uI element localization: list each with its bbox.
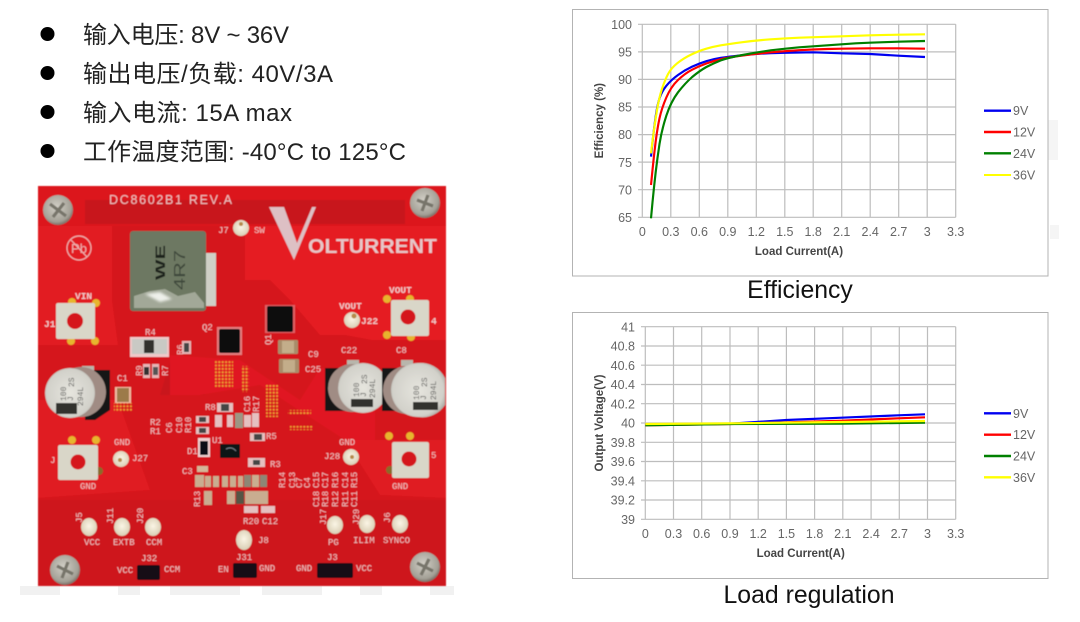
- regulation x axis labels: 0.9: [721, 527, 739, 541]
- regulation x axis labels: 3.3: [947, 527, 964, 541]
- silkscreen labels: R4: [145, 328, 156, 338]
- silkscreen labels: EN: [218, 565, 229, 575]
- bullet: input voltage: 输入电压: 8V ~ 36V: [83, 22, 289, 49]
- silkscreen labels: C9: [308, 350, 319, 360]
- regulation legend: 24V: [1013, 450, 1036, 464]
- silkscreen labels: J17: [319, 509, 329, 525]
- efficiency y axis labels: 100: [611, 18, 632, 32]
- silkscreen labels: VOUT: [339, 301, 362, 312]
- silkscreen labels: R1: [150, 427, 161, 437]
- silkscreen labels: VCC: [356, 564, 373, 574]
- regulation y axis labels: 39.8: [611, 436, 635, 450]
- silkscreen labels: VCC: [117, 566, 134, 576]
- panel: load regulation chart: [572, 312, 1048, 578]
- efficiency legend: 9V: [1013, 104, 1029, 118]
- efficiency x axis labels: 0.9: [719, 225, 737, 239]
- silkscreen labels: J22: [361, 316, 378, 327]
- efficiency legend: 24V: [1013, 147, 1036, 161]
- silkscreen labels: GND: [339, 438, 355, 448]
- regulation y axis labels: 40.6: [611, 359, 635, 373]
- regulation x axis labels: 1.5: [778, 527, 795, 541]
- silkscreen labels: ILIM: [353, 536, 375, 546]
- regulation y axis labels: 40: [621, 416, 635, 430]
- silkscreen labels: J8: [258, 536, 269, 546]
- small SMD parts: [143, 341, 275, 513]
- silkscreen labels: C8: [396, 346, 407, 356]
- efficiency y axis labels: 85: [618, 100, 632, 114]
- copper planes: [38, 186, 446, 226]
- silkscreen labels: VOUT: [389, 285, 412, 296]
- regulation y axis labels: 39: [621, 513, 635, 527]
- ceramic capacitors: [115, 340, 299, 403]
- jumper headers: [137, 563, 353, 580]
- efficiency x axis labels: 1.5: [776, 225, 794, 239]
- inductor: 4R7: [172, 250, 189, 290]
- silkscreen labels: C7: [295, 477, 305, 488]
- current sense resistor R4: [130, 337, 169, 357]
- efficiency x axis labels: 0: [639, 225, 646, 239]
- regulation y axis labels: 39.6: [611, 455, 635, 469]
- test points: [81, 220, 408, 550]
- panel: efficiency chart: [572, 10, 1048, 276]
- silkscreen labels: J6: [383, 512, 393, 523]
- efficiency y axis labels: 70: [618, 184, 632, 198]
- electrolytic capacitors C22 and C8: 2S: [421, 377, 430, 387]
- silkscreen labels: CCM: [146, 538, 162, 548]
- silkscreen labels: J1: [44, 319, 56, 330]
- regulation legend: 36V: [1013, 471, 1036, 485]
- efficiency y axis labels: 75: [618, 156, 632, 170]
- silkscreen labels: J32: [141, 554, 157, 564]
- electrolytic capacitor C-left: 294L: [77, 387, 86, 406]
- efficiency legend: 36V: [1013, 168, 1036, 182]
- efficiency x axis labels: 2.7: [890, 225, 907, 239]
- efficiency x axis labels: 2.4: [862, 225, 879, 239]
- regulation y axis labels: 40.4: [611, 378, 635, 392]
- silkscreen labels: J28: [324, 452, 340, 462]
- regulation axis titles: Load Current(A): [757, 548, 845, 560]
- silkscreen labels: C25: [305, 365, 321, 375]
- regulation x axis labels: 0: [642, 527, 649, 541]
- silkscreen labels: C16: [243, 396, 253, 412]
- electrolytic capacitors C22 and C8: 2S: [361, 374, 370, 384]
- caption: efficiency: Efficiency: [747, 277, 853, 304]
- silkscreen labels: C17: [321, 472, 331, 488]
- MOSFETs and controller: [198, 305, 295, 458]
- efficiency axis titles: [594, 83, 843, 258]
- silkscreen labels: SW: [254, 226, 265, 236]
- silkscreen labels: R11: [341, 491, 351, 507]
- silkscreen labels: C15: [312, 472, 322, 488]
- efficiency y axis labels: 95: [618, 46, 632, 60]
- specification list: [40, 22, 406, 166]
- efficiency axis titles: Efficiency (%): [594, 83, 606, 158]
- regulation curves: [645, 414, 925, 425]
- silkscreen labels: R5: [266, 432, 277, 442]
- silkscreen labels: C18: [312, 491, 322, 507]
- efficiency x axis labels: 1.8: [805, 225, 822, 239]
- silkscreen labels: J29: [352, 509, 362, 525]
- silkscreen labels: J: [50, 456, 55, 466]
- efficiency x axis labels: 3: [924, 225, 931, 239]
- inductor: [130, 231, 216, 311]
- bullet: output voltage and load: 输出电压/负载: 40V/3A: [83, 61, 333, 88]
- electrolytic capacitors C22 and C8: [325, 360, 445, 417]
- regulation y axis labels: 40.8: [611, 340, 635, 354]
- silkscreen labels: GND: [392, 482, 408, 492]
- silkscreen labels: J20: [136, 508, 146, 524]
- regulation axis titles: [594, 374, 845, 560]
- efficiency x axis labels: 0.6: [691, 225, 708, 239]
- regulation y axis labels: [611, 320, 635, 527]
- electrolytic capacitor C-left: [45, 366, 110, 420]
- regulation x axis labels: 1.8: [806, 527, 823, 541]
- silkscreen labels: GND: [80, 482, 96, 492]
- silkscreen labels: R10: [184, 417, 194, 433]
- icon: lead free: Pb: [71, 241, 87, 256]
- silkscreen labels: R16: [331, 472, 341, 488]
- efficiency grid: [638, 24, 956, 217]
- silkscreen labels: R9: [135, 365, 145, 376]
- silkscreen labels: J3: [327, 553, 338, 563]
- silkscreen labels: C14: [341, 472, 351, 488]
- silkscreen labels: U1: [212, 436, 223, 446]
- regulation x axis labels: 1.2: [750, 527, 767, 541]
- terminal: GND left: [58, 436, 103, 480]
- silkscreen labels: VCC: [84, 538, 101, 548]
- efficiency y axis labels: 65: [618, 211, 632, 225]
- regulation x axis labels: 2.7: [891, 527, 908, 541]
- silkscreen labels: C3: [182, 467, 193, 477]
- efficiency y axis labels: [611, 18, 632, 225]
- silkscreen labels: R14: [278, 472, 288, 488]
- silkscreen labels: [44, 226, 437, 576]
- silkscreen labels: R2: [150, 418, 161, 428]
- electrolytic capacitors C22 and C8: 100: [353, 382, 362, 397]
- silkscreen labels: R17: [252, 396, 262, 412]
- silkscreen labels: CCM: [164, 565, 180, 575]
- terminal: GND right: [385, 432, 429, 478]
- regulation y axis labels: 41: [621, 320, 635, 334]
- logo: Volturrent: OLTURRENT: [308, 236, 437, 258]
- bullet: temperature range: 工作温度范围: -40°C to 125°C: [83, 139, 406, 166]
- silkscreen labels: D1: [187, 447, 198, 457]
- silkscreen labels: J31: [236, 553, 252, 563]
- efficiency x axis labels: 3.3: [947, 225, 964, 239]
- silkscreen labels: J11: [106, 508, 116, 524]
- regulation x axis labels: [642, 527, 964, 541]
- logo: Volturrent: [269, 207, 437, 260]
- silkscreen labels: 5: [431, 451, 436, 461]
- regulation x axis labels: 2.4: [862, 527, 880, 541]
- background watermark: [20, 120, 1059, 595]
- silkscreen labels: PG: [328, 538, 339, 548]
- silkscreen labels: R20: [243, 517, 259, 527]
- regulation y axis labels: 39.4: [611, 474, 635, 488]
- silkscreen labels: Q1: [264, 334, 274, 345]
- mounting screws: [43, 188, 440, 585]
- silkscreen labels: R6: [176, 344, 186, 355]
- silkscreen labels: VIN: [75, 291, 92, 302]
- panel: evaluation board photo: [38, 186, 446, 586]
- silkscreen labels: GND: [114, 438, 130, 448]
- bullet: input current: 输入电流: 15A max: [83, 100, 292, 127]
- silkscreen labels: EXTB: [113, 538, 135, 548]
- efficiency curves: [651, 34, 925, 218]
- silkscreen labels: C4: [303, 477, 313, 488]
- regulation y axis labels: 40.2: [611, 398, 635, 412]
- efficiency legend: 12V: [1013, 126, 1036, 140]
- efficiency axis titles: Load Current(A): [755, 246, 843, 258]
- silkscreen labels: GND: [259, 564, 275, 574]
- regulation grid: [641, 327, 956, 519]
- regulation x axis labels: 3: [924, 527, 931, 541]
- terminal: VOUT: [383, 295, 429, 341]
- silkscreen labels: 4: [431, 316, 437, 327]
- silkscreen labels: R8: [205, 403, 216, 413]
- silkscreen labels: J27: [132, 454, 148, 464]
- regulation legend: 9V: [1013, 407, 1029, 421]
- regulation legend: 12V: [1013, 428, 1036, 442]
- electrolytic capacitor C-left: J: [67, 396, 76, 401]
- efficiency legend: [984, 104, 1036, 182]
- silkscreen labels: R7: [161, 365, 171, 376]
- silkscreen labels: J5: [75, 512, 85, 523]
- silkscreen labels: C22: [341, 346, 357, 356]
- board name: DC8602B1 REV.A: [109, 193, 233, 207]
- efficiency x axis labels: 0.3: [662, 225, 680, 239]
- electrolytic capacitors C22 and C8: 100: [413, 385, 422, 400]
- silkscreen labels: C13: [288, 472, 298, 488]
- efficiency x axis labels: 1.2: [748, 225, 765, 239]
- silkscreen labels: R15: [350, 472, 360, 488]
- silkscreen labels: Q2: [202, 323, 213, 333]
- electrolytic capacitors C22 and C8: 294L: [369, 379, 378, 398]
- icon: lead free: [67, 236, 91, 260]
- regulation axis titles: Output Voltage(V): [594, 374, 606, 471]
- silkscreen labels: J7: [218, 226, 229, 236]
- silkscreen labels: R13: [193, 491, 203, 507]
- efficiency y axis labels: 90: [618, 73, 632, 87]
- silkscreen labels: GND: [296, 564, 312, 574]
- silkscreen labels: C12: [262, 517, 278, 527]
- regulation y axis labels: 39.2: [611, 494, 635, 508]
- caption: load regulation: Load regulation: [724, 582, 894, 609]
- silkscreen labels: SYNCO: [383, 536, 410, 546]
- electrolytic capacitors C22 and C8: 294L: [430, 381, 439, 400]
- inductor: WE: [152, 245, 168, 280]
- efficiency y axis labels: 80: [618, 128, 632, 142]
- terminal: VIN: [56, 298, 100, 345]
- regulation x axis labels: 0.3: [665, 527, 682, 541]
- silkscreen labels: R3: [270, 460, 281, 470]
- electrolytic capacitor C-left: 2S: [68, 377, 77, 387]
- efficiency x axis labels: [639, 225, 964, 239]
- electrolytic capacitors C22 and C8: J: [420, 395, 429, 400]
- regulation x axis labels: 0.6: [693, 527, 710, 541]
- silkscreen labels: C11: [350, 491, 360, 507]
- silkscreen labels: R18: [321, 491, 331, 507]
- silkscreen labels: R12: [331, 491, 341, 507]
- regulation x axis labels: 2.1: [834, 527, 852, 541]
- regulation legend: [984, 407, 1036, 485]
- silkscreen labels: C10: [175, 417, 185, 433]
- efficiency x axis labels: 2.1: [833, 225, 850, 239]
- electrolytic capacitor C-left: 100: [60, 386, 69, 401]
- silkscreen labels: C6: [165, 422, 175, 433]
- electrolytic capacitors C22 and C8: J: [360, 392, 369, 397]
- silkscreen labels: C1: [117, 374, 128, 384]
- gold via arrays: [114, 360, 313, 430]
